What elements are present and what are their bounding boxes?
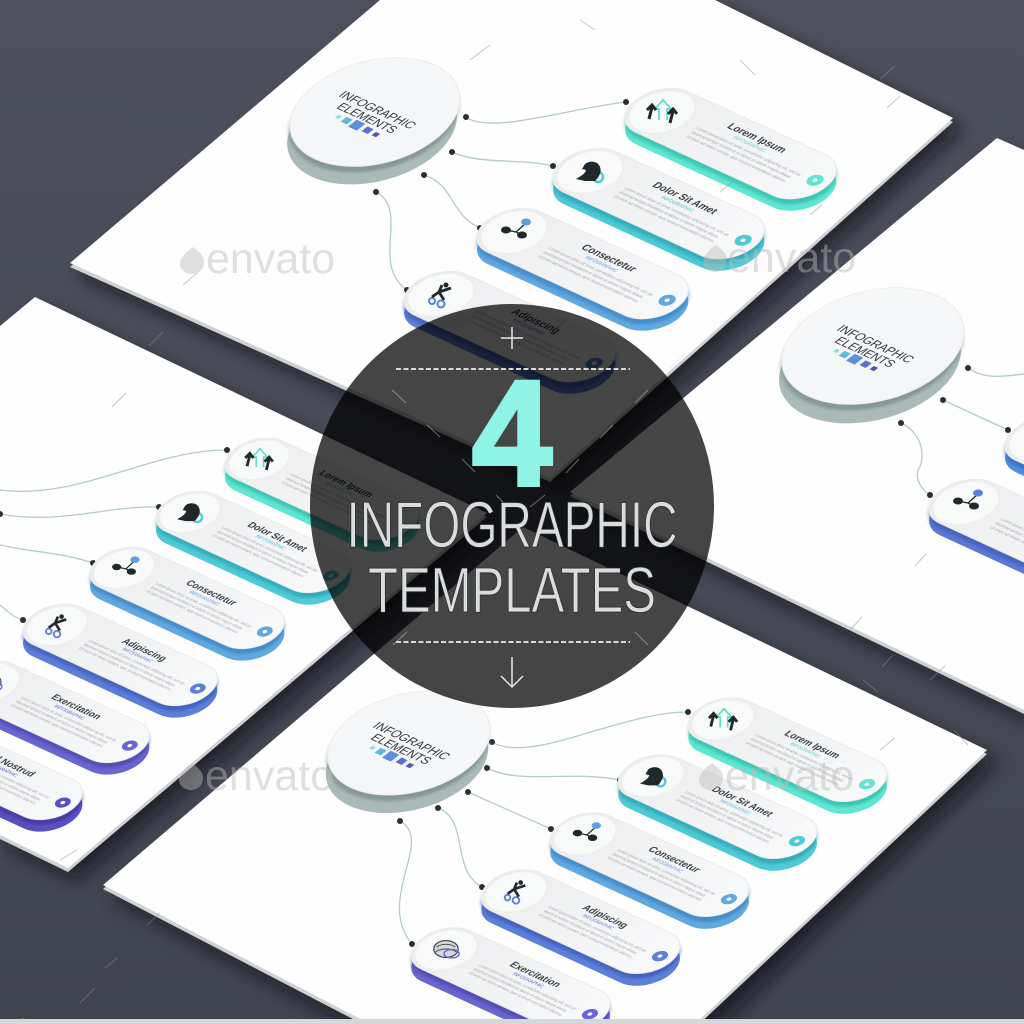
pill: left Dolor Sit Amet: Ut enim ad minim veniam, quis nostrud exercitation ullamco. — [211, 533, 307, 578]
pill: top Consectetur: Ut enim ad minim veniam, quis nostrud exercitation ullamco. — [537, 254, 641, 303]
pill: bottom Exercitation: Exercitation — [506, 960, 563, 990]
connectors: right sheet — [898, 365, 1024, 498]
pill: top Dolor Sit Amet: Lorem ipsum dolor sit amet, consectetur adipiscing elit, sed do — [623, 186, 731, 237]
pill: top Consectetur: INFOGRAPHIC — [583, 255, 619, 274]
pill: top Lorem Ipsum: eiusmod tempor incididunt ut labore et dolore magna aliqua. — [690, 130, 793, 179]
pill: top Lorem Ipsum — [600, 80, 861, 219]
pill: left Exercitation: INFOGRAPHIC — [52, 704, 86, 721]
connectors: bottom sheet — [397, 709, 691, 947]
pill: top Consectetur: Consectetur — [578, 243, 640, 274]
icon: flow — [112, 556, 140, 575]
pill: bottom Lorem Ipsum: Ut enim ad minim veniam, quis nostrud exercitation ullamco. — [744, 741, 842, 787]
pill: left Dolor Sit Amet: eiusmod tempor incididunt ut labore et dolore magna aliqua. — [216, 529, 311, 575]
big circle: right sheet — [741, 266, 1002, 445]
pill: bottom Adipiscing: Adipiscing — [579, 904, 631, 930]
pill: bottom Adipiscing: INFOGRAPHIC — [581, 914, 615, 931]
connectors: left sheet — [0, 447, 230, 623]
big circle: bottom sheet — [292, 672, 524, 832]
pill: bottom Lorem Ipsum: eiusmod tempor incididunt ut labore et dolore magna aliqua. — [749, 737, 846, 783]
pill: bottom Exercitation — [387, 920, 634, 1024]
icon: knight — [640, 767, 665, 786]
pill: left Dolor Sit Amet — [132, 483, 374, 613]
big circle: top sheet — [252, 37, 495, 205]
pill: left Adipiscing: INFOGRAPHIC — [120, 647, 154, 664]
icon: knight — [177, 503, 202, 522]
pill: top Dolor Sit Amet: eiusmod tempor incididunt ut labore et dolore magna aliqua. — [618, 190, 721, 239]
pill: bottom Consectetur: eiusmod tempor incididunt ut labore et dolore magna aliqua. — [611, 852, 708, 898]
pill: bottom Exercitation: INFOGRAPHIC — [511, 972, 545, 989]
pill: right sheet Dolor — [904, 471, 1024, 610]
pill: left Dolor Sit Amet: INFOGRAPHIC — [253, 534, 287, 551]
watermark: bottom right: envato — [725, 752, 854, 800]
pill: left Consectetur: Ut enim ad minim veniam, quis nostrud exercitation ullamco. — [145, 589, 241, 634]
pill: left Adipiscing: Lorem ipsum dolor sit amet, consectetur adipiscing elit, sed do — [87, 639, 187, 686]
divider bottom — [396, 641, 630, 643]
icon: runner — [46, 614, 66, 637]
icon: plus — [501, 327, 523, 349]
heading: infographic elements: ELEMENTS — [333, 101, 401, 136]
panel: right sheet — [570, 138, 1024, 714]
icon: arrows — [709, 709, 737, 730]
pill: left Dolor Sit Amet: Dolor Sit Amet — [244, 521, 310, 554]
pill: bottom Adipiscing — [457, 862, 704, 994]
connectors: top sheet — [373, 99, 629, 293]
pill: top Consectetur — [452, 200, 713, 339]
panel: left sheet — [0, 297, 487, 872]
pill: left Consectetur: Consectetur — [182, 579, 240, 608]
icon: down arrow — [501, 657, 523, 687]
pill: bottom Adipiscing: Lorem ipsum dolor sit amet, consectetur adipiscing elit, sed do — [547, 905, 649, 953]
title: infographic: INFOGRAPHIC — [346, 488, 678, 561]
pill: bottom Lorem Ipsum: Lorem ipsum dolor sit amet, consectetur adipiscing elit, sed do — [754, 733, 856, 781]
icon: runner — [429, 282, 451, 308]
number 4: 4 — [472, 349, 552, 517]
pill: bottom Consectetur: Ut enim ad minim veniam, quis nostrud exercitation ullamco. — [606, 856, 704, 902]
pill: top Lorem Ipsum: Lorem ipsum dolor sit amet, consectetur adipiscing elit, sed do — [695, 126, 803, 177]
pill: bottom Dolor Sit Amet: eiusmod tempor incididunt ut labore et dolore magna aliqua. — [679, 794, 776, 840]
big circle: bottom sheet: INFOGRAPHIC — [369, 720, 454, 762]
watermark: top right: envato — [727, 234, 856, 282]
pill: bottom Lorem Ipsum: INFOGRAPHIC — [788, 742, 822, 759]
pill: bottom Adipiscing: Ut enim ad minim veniam, quis nostrud exercitation ullamco. — [537, 913, 635, 959]
pill: bottom Adipiscing: eiusmod tempor incididunt ut labore et dolore magna aliqua. — [542, 909, 639, 955]
pill: left Lorem Ipsum: Ut enim ad minim veniam, quis nostrud exercitation ullamco. — [280, 480, 376, 525]
icon: flow — [501, 218, 531, 239]
pill: left Lorem Ipsum: Lorem ipsum dolor sit amet, consectetur adipiscing elit, sed do — [289, 473, 389, 520]
pill: left Lorem Ipsum: eiusmod tempor incididunt ut labore et dolore magna aliqua. — [285, 476, 380, 522]
pill: top Dolor Sit Amet — [528, 140, 789, 279]
pill: top Adipiscing: Adipiscing — [508, 307, 563, 336]
pill: left Consectetur: INFOGRAPHIC — [187, 590, 221, 607]
icon: arrows — [647, 100, 677, 123]
heading: infographic elements: INFOGRAPHIC — [335, 89, 420, 131]
title: templates: TEMPLATES — [368, 554, 656, 626]
pill: bottom Consectetur — [526, 804, 773, 937]
pill: top Adipiscing: INFOGRAPHIC — [510, 318, 546, 337]
icon: brain — [0, 674, 2, 691]
pill: top Adipiscing: Ut enim ad minim veniam, quis nostrud exercitation ullamco. — [464, 317, 568, 366]
pill: left Adipiscing: Ut enim ad minim veniam, quis nostrud exercitation ullamco. — [78, 646, 174, 691]
pill: top Lorem Ipsum: Lorem Ipsum — [724, 122, 790, 155]
pill: left Exercitation: Lorem ipsum dolor sit amet, consectetur adipiscing elit, sed do — [19, 696, 119, 743]
pill: left Lorem Ipsum — [201, 430, 443, 560]
big circle: bottom sheet: ELEMENTS — [367, 732, 435, 767]
icon: brain — [434, 941, 459, 958]
pill: left Exercitation: eiusmod tempor incididunt ut labore et dolore magna aliqua. — [15, 699, 110, 745]
pill: left Adipiscing: Adipiscing — [118, 637, 169, 663]
pill: top Dolor Sit Amet: Ut enim ad minim veniam, quis nostrud exercitation ullamco. — [613, 194, 717, 243]
pill: top Adipiscing — [379, 263, 640, 402]
pill: top Lorem Ipsum: INFOGRAPHIC — [731, 135, 767, 154]
pill: bottom Lorem Ipsum: Lorem Ipsum — [781, 729, 843, 761]
pill: top Consectetur: Lorem ipsum dolor sit amet, consectetur adipiscing elit, sed do — [547, 246, 655, 297]
pill: bottom Dolor Sit Amet: Dolor Sit Amet — [708, 785, 776, 819]
pill: bottom Consectetur: Lorem ipsum dolor sit amet, consectetur adipiscing elit, sed do — [616, 848, 718, 896]
pill: bottom Consectetur: Consectetur — [645, 845, 703, 875]
bottom strip — [0, 1019, 1024, 1024]
pill: bottom Dolor Sit Amet: Lorem ipsum dolor sit amet, consectetur adipiscing elit, sed do — [684, 790, 786, 838]
watermark: bottom left: envato — [205, 752, 334, 800]
central dark circle badge — [310, 304, 714, 708]
pill: bottom Exercitation: Lorem ipsum dolor sit amet, consectetur adipiscing elit, sed do — [477, 963, 579, 1011]
pill: left Consectetur: eiusmod tempor incididunt ut labore et dolore magna aliqua. — [150, 585, 245, 631]
pill: right sheet Lorem Ipsum — [980, 408, 1024, 547]
watermark: top left: envato — [206, 235, 335, 283]
big circle: right sheet: ELEMENTS — [831, 335, 899, 370]
pill: top Lorem Ipsum: Ut enim ad minim veniam, quis nostrud exercitation ullamco. — [685, 134, 789, 183]
panel: bottom sheet — [103, 527, 987, 1024]
big circle: right sheet: INFOGRAPHIC — [833, 323, 918, 365]
pill: left Consectetur: Lorem ipsum dolor sit amet, consectetur adipiscing elit, sed do — [154, 582, 254, 629]
icon: flow — [953, 489, 983, 510]
pill: left Exercitation: Ut enim ad minim veniam, quis nostrud exercitation ullamco. — [10, 703, 106, 748]
pill: top Adipiscing: eiusmod tempor incididunt ut labore et dolore magna aliqua. — [469, 313, 572, 362]
divider top — [396, 368, 630, 370]
pill: bottom Dolor Sit Amet — [594, 746, 841, 879]
pill: left Lorem Ipsum: INFOGRAPHIC — [322, 481, 356, 498]
pill: left Consectetur — [66, 539, 308, 669]
pill: top Dolor Sit Amet: Dolor Sit Amet — [649, 180, 721, 217]
pill: bottom Dolor Sit Amet: Ut enim ad minim veniam, quis nostrud exercitation ullamco. — [674, 798, 772, 844]
pill: left Adipiscing: eiusmod tempor incididunt ut labore et dolore magna aliqua. — [83, 642, 178, 688]
pill: top Adipiscing: Lorem ipsum dolor sit amet, consectetur adipiscing elit, sed do — [474, 309, 582, 360]
pill: left Dolor Sit Amet: Lorem ipsum dolor sit amet, consectetur adipiscing elit, sed do — [220, 526, 320, 573]
pill: left Lorem Ipsum: Lorem Ipsum — [316, 469, 376, 500]
pill: bottom Consectetur: INFOGRAPHIC — [650, 857, 684, 874]
panel: top sheet — [70, 0, 953, 482]
icon: knight — [576, 162, 603, 182]
pill: left Sed Nostrud — [0, 710, 106, 840]
pill: left Adipiscing — [0, 596, 241, 726]
pill: bottom Exercitation: eiusmod tempor incididunt ut labore et dolore magna aliqua. — [472, 967, 569, 1013]
pill: bottom Lorem Ipsum — [664, 690, 911, 822]
pill: bottom Dolor Sit Amet: INFOGRAPHIC — [718, 799, 752, 816]
pill: left Exercitation: Exercitation — [48, 693, 104, 722]
pill: bottom Exercitation: Ut enim ad minim veniam, quis nostrud exercitation ullamco. — [467, 971, 565, 1017]
icon: flow — [573, 822, 601, 841]
icon: runner — [505, 880, 525, 904]
pill: top Dolor Sit Amet: INFOGRAPHIC — [659, 195, 695, 214]
pill: left Exercitation — [0, 653, 173, 783]
pill: top Consectetur: eiusmod tempor incididunt ut labore et dolore magna aliqua. — [542, 250, 645, 299]
icon: arrows — [245, 449, 273, 470]
